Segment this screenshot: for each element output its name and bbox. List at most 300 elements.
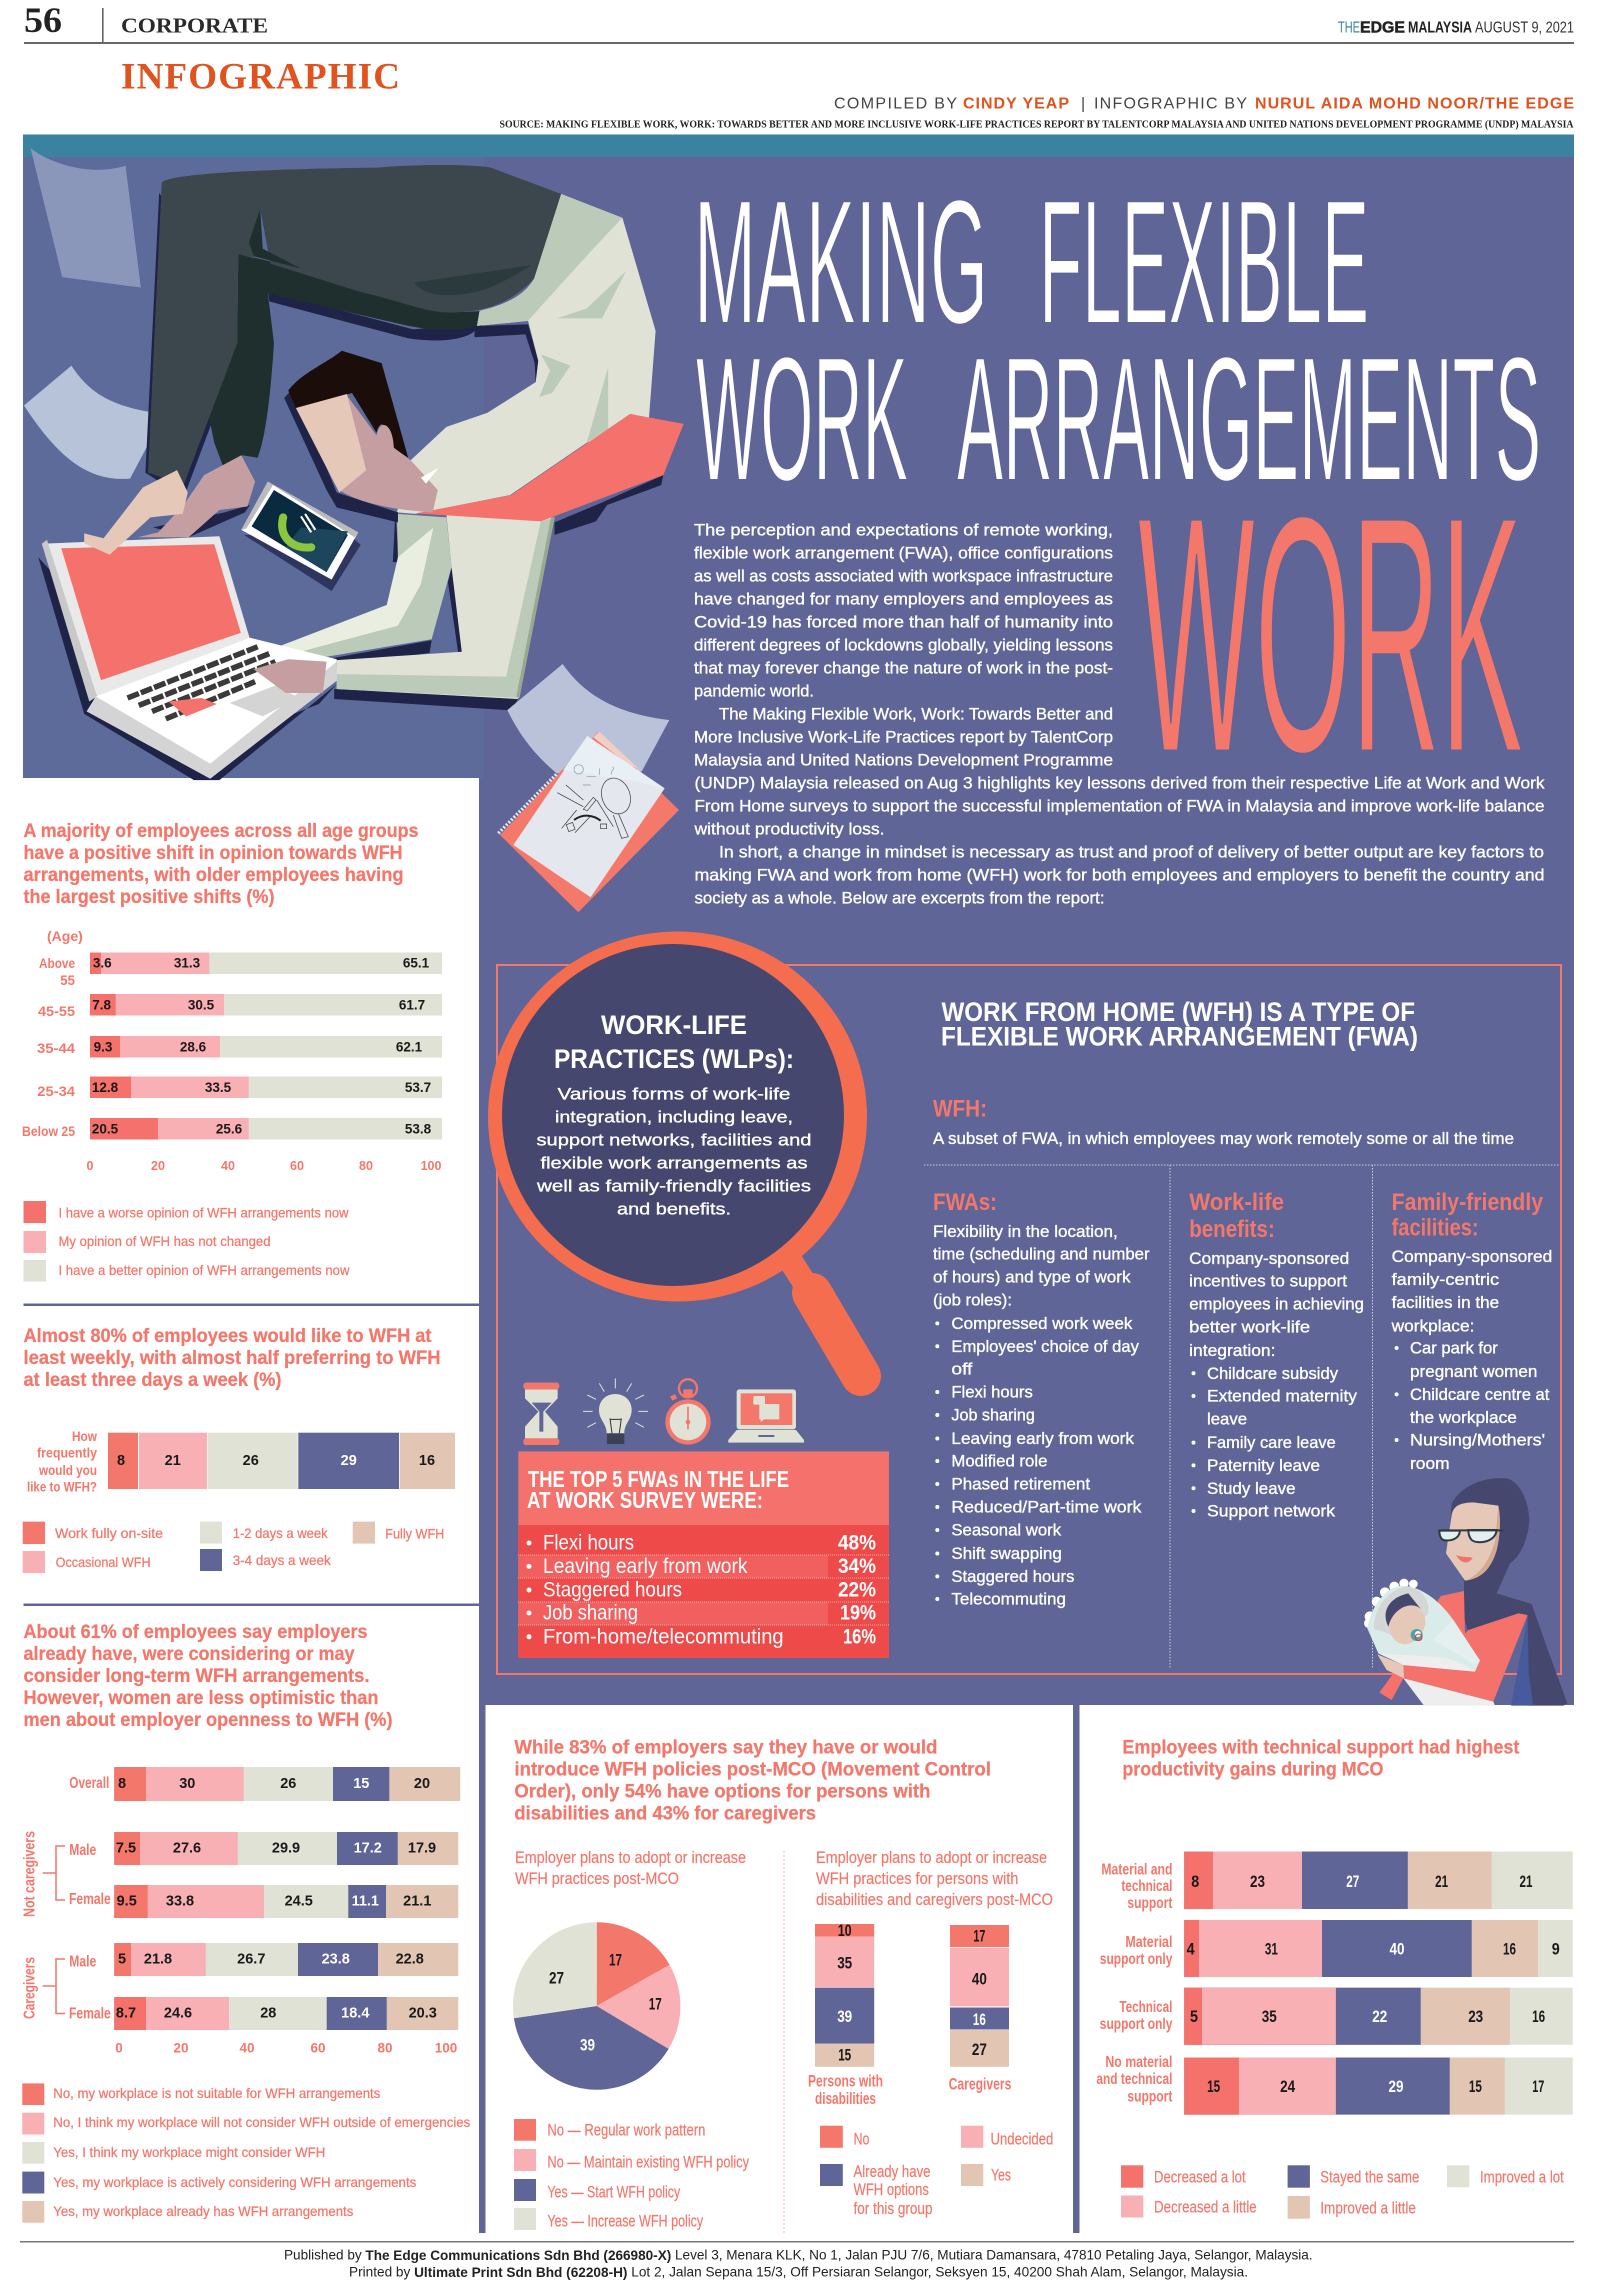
panel: top 5 FWAs: 16% (843, 1625, 876, 1648)
legend: I have a better opinion of WFH arrangements now (58, 1262, 350, 1278)
column: FWAs: Shift swapping (951, 1544, 1062, 1563)
main purple panel (479, 157, 1574, 1705)
column: FWAs: (job roles): (933, 1290, 1012, 1310)
stacked bars: Not caregivers (22, 1831, 38, 1917)
legend: Decreased a lot (1154, 2169, 1246, 2187)
pie chart: Employer plans to adopt or increase (515, 1849, 746, 1867)
stacked columns: 27 (972, 2040, 987, 2059)
magnifier: work-life practices: Various forms of work-life (558, 1084, 790, 1104)
chart panel: employer openness (22, 1621, 470, 2223)
column: FWAs: Staggered hours (951, 1567, 1074, 1586)
stacked bars: 16 (1503, 1940, 1516, 1958)
stacked bar: 26 (243, 1453, 259, 1469)
credits: NURUL AIDA MOHD NOOR/THE EDGE (1255, 96, 1574, 112)
column: FWAs: Leaving early from work (951, 1429, 1134, 1448)
column: family-friendly facilities: the workplace (1410, 1408, 1517, 1427)
stacked bars: 23.8 (322, 1952, 350, 1968)
heading: disabilities and 43% for caregivers (514, 1802, 816, 1824)
stacked bars: 31.3 (174, 956, 201, 970)
heading (514, 1736, 991, 1824)
column: FWAs: Modified role (951, 1452, 1047, 1470)
stacked bars: 5 (118, 1952, 126, 1968)
stacked bars: 8.7 (116, 2006, 136, 2022)
column legend: Already have (854, 2163, 930, 2181)
column: work-life benefits: Support network (1207, 1502, 1336, 1520)
column: work-life benefits: benefits: (1189, 1216, 1275, 1243)
stacked bars: 27 (1346, 1872, 1359, 1891)
stacked bars: 15 (1469, 2077, 1482, 2096)
legend: 3-4 days a week (233, 1552, 332, 1568)
column: family-friendly facilities: Nursing/Mothers' (1410, 1430, 1545, 1450)
stacked columns: WFH practices for persons with (816, 1870, 1018, 1888)
stacked bars: 0 (115, 2040, 123, 2056)
column: FWAs: Flexi hours (951, 1382, 1033, 1402)
stacked bars: 17.9 (408, 1840, 436, 1856)
column: FWAs: Phased retirement (951, 1474, 1090, 1494)
stacked bars: 35-44 (37, 1040, 75, 1056)
legend: Yes, my workplace already has WFH arrangements (53, 2203, 353, 2219)
legend: 1-2 days a week (233, 1525, 329, 1541)
column legend: WFH options (854, 2181, 929, 2199)
stacked bars: 16 (1532, 2007, 1545, 2026)
illustration: man working on laptop (23, 148, 684, 780)
stacked bars: and technical (1096, 2071, 1172, 2088)
stacked bars: 20 (151, 1159, 165, 1173)
pie chart (513, 1849, 746, 2090)
stacked bars: 62.1 (396, 1040, 423, 1054)
stacked columns: Employer plans to adopt or increase (816, 1849, 1047, 1867)
masthead (24, 0, 1574, 44)
stacked bars: 60 (310, 2040, 326, 2056)
stacked bars: 53.8 (405, 1122, 432, 1136)
heading: About 61% of employees say employers (24, 1621, 368, 1643)
intro text: The perception and expectations of remote working, (694, 520, 1113, 540)
panel: top 5 FWAs: THE TOP 5 FWAs IN THE LIFE (528, 1466, 789, 1492)
masthead: AUGUST 9, 2021 (1475, 20, 1574, 36)
definition: WFH: A subset of FWA, in which employees may work remotely some or all the time (933, 1129, 1514, 1148)
stacked bars: 35 (1262, 2007, 1277, 2026)
heading: consider long-term WFH arrangements. (24, 1665, 370, 1687)
legend: Decreased a little (1154, 2198, 1257, 2216)
pie chart: 27 (549, 1968, 564, 1988)
credits: INFOGRAPHIC BY (1094, 96, 1247, 112)
stacked bars: 8 (1191, 1872, 1199, 1891)
intro text: that may forever change the nature of work in the post- (694, 658, 1113, 678)
stacked bars: 17 (1532, 2077, 1544, 2096)
stacked bars: 53.7 (405, 1080, 431, 1095)
intro text: pandemic world. (694, 682, 814, 700)
stacked bars: support only (1100, 2016, 1172, 2033)
stacked bars: 25-34 (37, 1083, 75, 1099)
column legend: Undecided (990, 2130, 1053, 2148)
panel: top 5 FWAs (518, 1451, 889, 1658)
stacked bars: Male (69, 1954, 96, 1970)
stacked bars: 33.5 (205, 1080, 232, 1095)
stacked bars: 55 (60, 972, 75, 988)
stacked columns: 15 (838, 2046, 851, 2064)
intro text (693, 520, 1545, 908)
intro text: making FWA and work from home (WFH) work for both employees and employers to benefit the country and (694, 866, 1544, 884)
masthead: THE (1338, 20, 1360, 36)
stacked bars: support (1127, 1895, 1173, 1912)
magnifier: work-life practices: integration, including leave, (555, 1108, 793, 1126)
column: work-life benefits: better work-life (1189, 1318, 1310, 1336)
stacked bars: Male (69, 1842, 96, 1859)
heading: least weekly, with almost half preferring to WFH (24, 1347, 440, 1369)
stacked columns: Persons with (808, 2073, 883, 2091)
column: work-life benefits: Study leave (1207, 1479, 1296, 1498)
heading: productivity gains during MCO (1122, 1758, 1383, 1780)
panel: top 5 FWAs: Flexi hours (543, 1532, 634, 1554)
column: work-life benefits: Work-life (1189, 1189, 1284, 1216)
stacked bars: 17.2 (354, 1840, 382, 1856)
heading: arrangements, with older employees having (24, 864, 404, 886)
stacked bars: 29.9 (272, 1840, 300, 1856)
stacked bars: 80 (359, 1159, 373, 1173)
stacked bars: 26 (280, 1776, 296, 1792)
stacked columns: 35 (837, 1954, 852, 1972)
column legend: for this group (854, 2200, 932, 2218)
legend: Yes, my workplace is actively considering WFH arrangements (53, 2174, 416, 2190)
stacked columns: disabilities and caregivers post-MCO (816, 1891, 1053, 1909)
stacked bars (22, 928, 442, 1173)
stacked columns: 17 (973, 1926, 985, 1945)
stacked bars: 5 (1190, 2007, 1198, 2026)
stacked bars: 20.3 (409, 2006, 437, 2022)
heading: at least three days a week (%) (24, 1369, 282, 1391)
stacked bars: 11.1 (352, 1894, 379, 1910)
stacked bars: 7.8 (92, 998, 112, 1012)
stacked bars: Above (39, 955, 75, 971)
stacked columns: 10 (838, 1921, 852, 1940)
stacked columns: 16 (973, 2010, 986, 2029)
column: work-life benefits: Family care leave (1207, 1433, 1336, 1452)
panel: top 5 FWAs: AT WORK SURVEY WERE: (527, 1487, 763, 1513)
stacked columns: Caregivers (949, 2076, 1011, 2094)
pie chart: 17 (649, 1994, 662, 2014)
column: FWAs: Reduced/Part-time work (951, 1498, 1142, 1516)
intro text: have changed for many employers and employees as (694, 590, 1113, 608)
stacked bars: 21.1 (403, 1894, 431, 1910)
heading (1122, 1736, 1520, 1780)
pie chart: WFH practices post-MCO (515, 1870, 679, 1888)
intro text: (UNDP) Malaysia released on Aug 3 highlights key lessons derived from their respective Life at Work and Work (694, 774, 1545, 792)
intro text: Covid-19 has forced more than half of humanity into (694, 612, 1113, 632)
pie legend: No — Maintain existing WFH policy (547, 2154, 750, 2172)
panel: top 5 FWAs: Job sharing (543, 1602, 638, 1624)
stacked bars: 20 (414, 1776, 430, 1792)
stacked bars: Overall (69, 1775, 109, 1792)
heading: Order), only 54% have options for persons with (514, 1780, 930, 1802)
footer (20, 2241, 1574, 2280)
intro text: without productivity loss. (693, 820, 884, 838)
footer: Printed by Ultimate Print Sdn Bhd (62208-H) Lot 2, Jalan Sepana 15/3, Off Persiaran Selangor, Seksyen 15, 40200 Shah Alam, Selangor, Malaysia. (349, 2264, 1248, 2280)
column: FWAs: FWAs: (933, 1189, 997, 1216)
stacked bars: 40 (239, 2040, 255, 2056)
pie legend: No — Regular work pattern (547, 2122, 705, 2140)
column: FWAs: Employees' choice of day (951, 1337, 1139, 1356)
stacked bars: Technical (1119, 1999, 1172, 2016)
column: family-friendly facilities: family-centric (1392, 1270, 1500, 1289)
stacked bars: 20 (173, 2040, 189, 2056)
stacked bars: (Age) (47, 928, 83, 944)
column: family-friendly facilities: Car park for (1410, 1338, 1498, 1358)
column: FWAs: off (951, 1360, 973, 1378)
heading: However, women are less optimistic than (24, 1687, 378, 1709)
heading: men about employer openness to WFH (%) (24, 1709, 392, 1731)
stacked bar: like to WFH? (27, 1479, 97, 1495)
magnifier: work-life practices: and benefits. (617, 1200, 731, 1218)
stacked bar: would you (38, 1462, 97, 1478)
heading: Almost 80% of employees would like to WFH at (24, 1325, 432, 1347)
column: family-friendly facilities: facilities: (1392, 1214, 1479, 1241)
stacked bars: 22.8 (396, 1952, 424, 1968)
stacked bar: 21 (165, 1453, 181, 1469)
chart panel: employer WFH plans (513, 1736, 1053, 2233)
intro text: society as a whole. Below are excerpts from the report: (694, 888, 1104, 908)
heading: the largest positive shifts (%) (24, 886, 274, 908)
panel: top 5 FWAs: 19% (840, 1602, 876, 1624)
stacked bar: 8 (117, 1453, 125, 1469)
masthead: EDGE (1360, 20, 1405, 36)
legend: No, I think my workplace will not consider WFH outside of emergencies (53, 2114, 470, 2130)
column: work-life benefits: Company-sponsored (1189, 1249, 1349, 1268)
column: work-life benefits: Paternity leave (1207, 1456, 1320, 1475)
column: FWAs: Job sharing (951, 1406, 1035, 1424)
definition: WFH (933, 1096, 1514, 1148)
panel: top 5 FWAs: 22% (838, 1578, 876, 1602)
credits: COMPILED BY (834, 96, 957, 112)
heading (24, 1325, 440, 1391)
column: FWAs: Compressed work week (951, 1314, 1133, 1333)
stacked bars: Female (69, 1891, 111, 1908)
chart panel: change of opinion by age (22, 820, 442, 1282)
column legend: No (854, 2130, 870, 2148)
footer: Published by The Edge Communications Sdn Bhd (266980-X) Level 3, Menara KLK, No 1, Jalan PJU 7/6, Mutiara Damansara, 47810 Petaling Jaya, Selangor, Malaysia. (284, 2248, 1313, 2262)
stacked bars: support only (1100, 1951, 1172, 1968)
legend: Stayed the same (1320, 2169, 1419, 2187)
heading: WFH is a type of FWA (941, 997, 1418, 1052)
column: FWAs: Flexibility in the location, (933, 1222, 1118, 1241)
stacked bars: 21.8 (144, 1952, 172, 1968)
heading: While 83% of employers say they have or would (514, 1736, 937, 1758)
stacked bars: 23 (1250, 1872, 1265, 1891)
stacked bars: 80 (377, 2040, 393, 2056)
heading (24, 820, 419, 908)
stacked bars: 31 (1265, 1940, 1278, 1958)
stacked bars: 9.3 (94, 1040, 113, 1054)
stacked columns: disabilities (815, 2090, 876, 2108)
stacked bar: 16 (419, 1453, 435, 1469)
legend: No, my workplace is not suitable for WFH arrangements (53, 2085, 380, 2101)
pie chart: 17 (609, 1950, 622, 1970)
intro text: In short, a change in mindset is necessary as trust and proof of delivery of better output are key factors to (719, 842, 1544, 862)
stacked bars: 29 (1388, 2077, 1404, 2096)
heading: A majority of employees across all age groups (24, 820, 419, 842)
column: family-friendly facilities: Childcare centre at (1410, 1385, 1550, 1404)
stacked bars: No material (1105, 2054, 1172, 2071)
magnifier: work-life practices: WORK-LIFE (601, 1010, 747, 1040)
stacked bars: 12.8 (92, 1080, 119, 1095)
magnifier: work-life practices: PRACTICES (WLPs): (554, 1044, 794, 1074)
legend (24, 1201, 350, 1282)
panel: top 5 FWAs: Staggered hours (543, 1578, 682, 1602)
pie chart: 39 (580, 2036, 595, 2054)
column: family-friendly facilities (1391, 1189, 1552, 1473)
stacked bars: 61.7 (399, 998, 425, 1012)
column: FWAs: time (scheduling and number (933, 1244, 1150, 1264)
stacked bars: 30.5 (188, 998, 215, 1012)
intro text: The Making Flexible Work, Work: Towards Better and (719, 704, 1113, 724)
stacked bars (1096, 1852, 1573, 2115)
chart panel: productivity and technical support (1096, 1736, 1573, 2219)
column: FWAs: of hours) and type of work (933, 1268, 1131, 1286)
title: making flexible work arrangements (694, 163, 1541, 518)
magnifier: work-life practices (488, 932, 867, 1376)
legend: I have a worse opinion of WFH arrangements now (58, 1204, 349, 1220)
stacked bars: 24.5 (285, 1894, 313, 1910)
stacked bars: 21 (1520, 1872, 1532, 1891)
stacked bar: How (72, 1428, 97, 1444)
intro text: Malaysia and United Nations Development Programme (694, 750, 1113, 770)
column: work-life benefits: integration: (1189, 1341, 1276, 1360)
chart panel: preferred WFH frequency (23, 1325, 455, 1573)
panel: definitions frame (497, 965, 1561, 1674)
intro text: as well as costs associated with workspace infrastructure (694, 566, 1113, 586)
stacked bars: 30 (179, 1776, 195, 1792)
panel: top 5 FWAs: From-home/telecommuting (543, 1625, 784, 1648)
stacked bars: 40 (221, 1159, 235, 1173)
panel: top 5 FWAs: 48% (838, 1532, 876, 1554)
stacked bars: 21 (1435, 1872, 1448, 1891)
stacked bars: 9.5 (117, 1894, 137, 1910)
stacked bars: 3.6 (93, 956, 112, 970)
stacked bars: 65.1 (403, 956, 430, 970)
panel: top 5 FWAs: 34% (838, 1555, 876, 1578)
intro text: flexible work arrangement (FWA), office configurations (694, 544, 1113, 562)
stacked bar (27, 1428, 455, 1495)
column: work-life benefits: Extended maternity (1207, 1386, 1358, 1406)
column: work-life benefits (1189, 1189, 1364, 1520)
column legend (820, 2126, 1053, 2218)
column: FWAs: Seasonal work (951, 1520, 1062, 1540)
masthead: CORPORATE (121, 14, 268, 38)
heading: WFH is a type of FWA: FLEXIBLE WORK ARRANGEMENT (FWA) (941, 1022, 1418, 1052)
stacked bars: 4 (1187, 1940, 1195, 1958)
stacked bars: 24.6 (164, 2006, 192, 2022)
column: FWAs: Telecommuting (951, 1590, 1066, 1608)
stacked columns (808, 1849, 1053, 2108)
stacked bars (22, 1767, 460, 2056)
stacked bars: 22 (1372, 2007, 1387, 2026)
column: work-life benefits: leave (1207, 1410, 1247, 1428)
heading: Employees with technical support had highest (1122, 1736, 1520, 1758)
heading (24, 1621, 392, 1731)
credits: | (1081, 96, 1085, 112)
illustration: floating sheet and notebook (498, 664, 679, 912)
masthead: MALAYSIA (1408, 20, 1472, 36)
heading: already have, were considering or may (24, 1643, 355, 1665)
column: work-life benefits: employees in achieving (1189, 1294, 1364, 1314)
heading: introduce WFH policies post-MCO (Movement Control (514, 1758, 991, 1780)
legend: Improved a lot (1480, 2169, 1564, 2187)
stacked bars: Material and (1101, 1861, 1172, 1878)
column: family-friendly facilities: Family-friendly (1392, 1189, 1544, 1216)
column: family-friendly facilities: room (1410, 1454, 1450, 1473)
legend: My opinion of WFH has not changed (58, 1233, 270, 1249)
stacked bars: 23 (1468, 2007, 1483, 2026)
intro text: More Inclusive Work-Life Practices report by TalentCorp (694, 728, 1113, 746)
masthead: 56 (24, 0, 62, 40)
illustration: mother and baby (1364, 1478, 1567, 1706)
stacked bars: 100 (421, 1159, 441, 1173)
stacked bars: 25.6 (216, 1122, 243, 1136)
stacked bars: 20.5 (92, 1122, 119, 1136)
stacked bars: support (1127, 2088, 1173, 2106)
stacked bars: 8 (118, 1776, 126, 1792)
credits (834, 96, 1574, 112)
credits: CINDY YEAP (963, 96, 1069, 112)
definition: WFH: WFH: (933, 1096, 987, 1122)
stacked bars: Material (1125, 1934, 1172, 1951)
teal band (23, 134, 1574, 158)
legend: Improved a little (1320, 2200, 1416, 2218)
legend (22, 2083, 470, 2223)
heading: WFH is a type of FWA: WORK FROM HOME (WFH) IS A TYPE OF (942, 997, 1415, 1027)
legend: Occasional WFH (56, 1554, 151, 1570)
magnifier: work-life practices: support networks, facilities and (536, 1130, 812, 1150)
stacked bars: 40 (1390, 1940, 1404, 1958)
section heading: infographic: INFOGRAPHIC (121, 56, 400, 98)
stacked bars: 45-55 (38, 1003, 75, 1019)
stacked bars: 28 (260, 2006, 276, 2022)
title: making flexible work arrangements: WORK (696, 320, 908, 518)
column: family-friendly facilities: pregnant women (1410, 1362, 1537, 1381)
column: family-friendly facilities: facilities in the (1392, 1293, 1499, 1312)
pie legend: Yes — Start WFH policy (547, 2184, 681, 2202)
stacked bars: 26.7 (237, 1952, 265, 1968)
stacked bars: 7.5 (116, 1840, 136, 1856)
column legend: Yes (991, 2167, 1011, 2185)
stacked bars: 27.6 (173, 1840, 201, 1856)
stacked bars: 24 (1280, 2077, 1296, 2096)
pie legend: Yes — Increase WFH policy (547, 2213, 704, 2231)
stacked bars: 28.6 (180, 1040, 207, 1054)
column: family-friendly facilities: Company-sponsored (1392, 1247, 1552, 1266)
column: family-friendly facilities: workplace: (1391, 1316, 1474, 1335)
stacked bars: technical (1121, 1878, 1172, 1895)
title: making flexible work arrangements: MAKING (694, 163, 988, 361)
intro text: different degrees of lockdowns globally, yielding lessons (694, 636, 1113, 654)
stacked bars: Caregivers (22, 1957, 38, 2019)
legend: Fully WFH (385, 1526, 444, 1542)
stacked bars: 33.8 (166, 1894, 194, 1910)
legend (1121, 2165, 1564, 2219)
stacked bars: Female (69, 2006, 111, 2022)
column: work-life benefits: incentives to support (1189, 1272, 1347, 1290)
panel: top 5 FWAs: Leaving early from work (543, 1555, 748, 1578)
magnifier: work-life practices: well as family-friendly facilities (536, 1176, 811, 1196)
intro text: From Home surveys to support the successful implementation of FWA in Malaysia and improve work-life balance (694, 796, 1544, 816)
stacked bars: 18.4 (341, 2006, 369, 2022)
stacked bars: 15 (1207, 2077, 1220, 2096)
stacked bars: 15 (353, 1776, 369, 1792)
stacked bar: 29 (341, 1453, 357, 1469)
stacked bars: 0 (87, 1159, 94, 1173)
white panel separators (479, 1705, 1080, 2233)
stacked bars: 60 (290, 1159, 304, 1173)
stacked bars: 9 (1552, 1940, 1560, 1958)
